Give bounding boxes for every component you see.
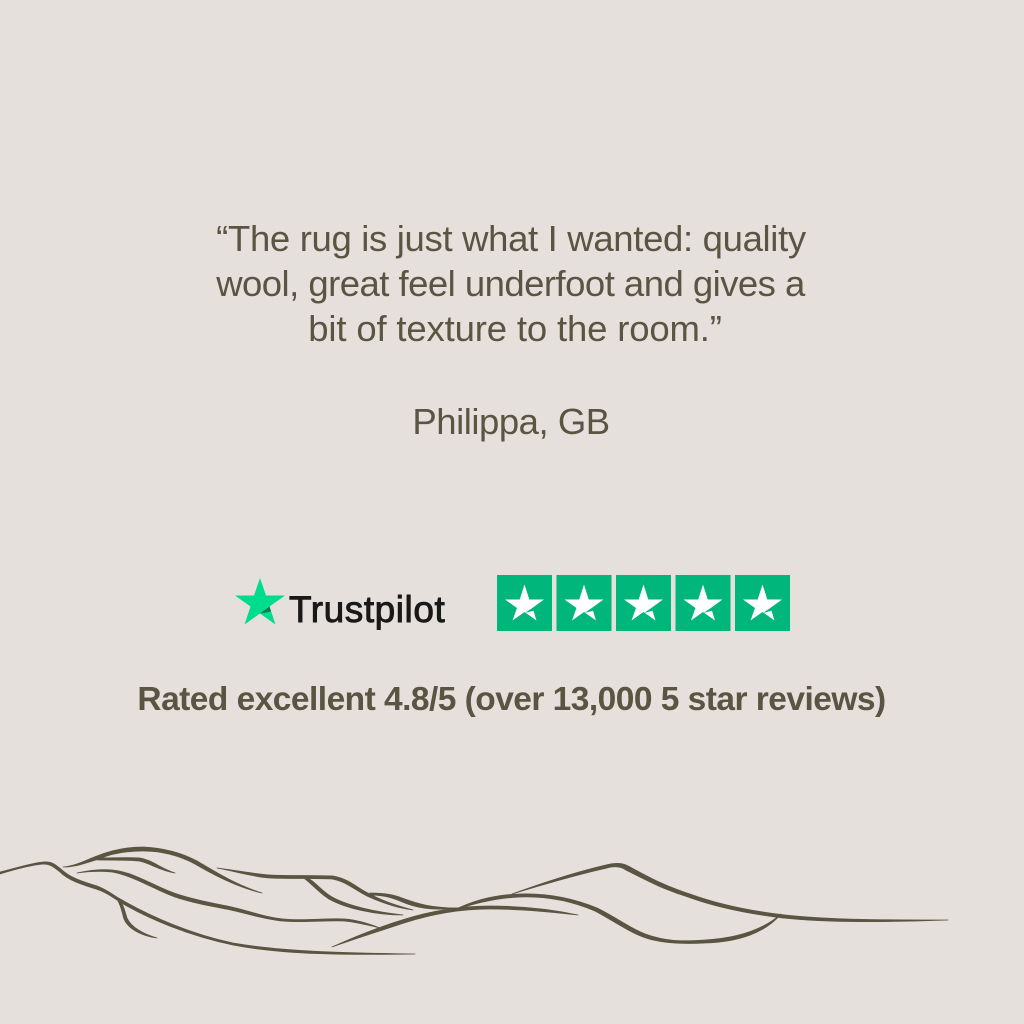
small left branch	[118, 900, 157, 938]
review quote: bit of texture to the room.”	[308, 308, 722, 349]
Trustpilot wordmark: Trustpilot	[289, 589, 445, 630]
top ridge	[63, 847, 262, 893]
right peak and tapering horizon	[512, 863, 948, 922]
review quote: “The rug is just what I wanted: quality	[216, 218, 806, 259]
review quote	[216, 218, 806, 349]
icon: Trustpilot star logo	[235, 578, 285, 624]
five star rating	[497, 575, 790, 631]
lower right branch	[305, 878, 403, 915]
left ridge and long lower sweep	[0, 862, 415, 954]
rising long dune	[332, 906, 578, 947]
second dune with valley	[452, 894, 781, 944]
rating summary: Rated excellent 4.8/5 (over 13,000 5 star reviews)	[137, 681, 886, 718]
reviewer name: Philippa, GB	[412, 401, 610, 442]
trailing branch	[370, 893, 457, 909]
upper right ridge	[217, 868, 413, 910]
review quote: wool, great feel underfoot and gives a	[216, 263, 805, 304]
short top branch	[97, 858, 175, 873]
middle ridge	[77, 870, 380, 928]
